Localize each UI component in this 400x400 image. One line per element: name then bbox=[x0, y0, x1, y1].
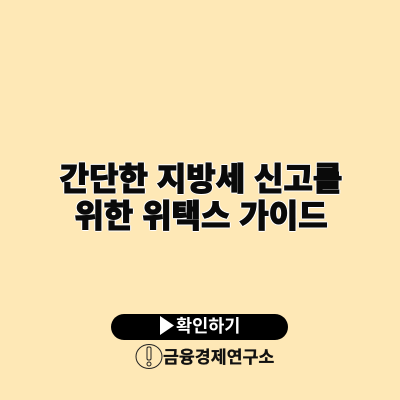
button: 확인하기: 확인하기 bbox=[176, 316, 240, 336]
button: 확인하기 bbox=[111, 314, 288, 340]
icon: exclamation circle bbox=[136, 344, 162, 369]
title: 위한 위택스 가이드 bbox=[74, 198, 328, 234]
brand: 금융경제연구소 bbox=[136, 344, 274, 369]
brand name: 금융경제연구소 bbox=[163, 347, 274, 367]
title: 간단한 지방세 신고를 bbox=[60, 161, 342, 197]
title bbox=[59, 161, 343, 234]
